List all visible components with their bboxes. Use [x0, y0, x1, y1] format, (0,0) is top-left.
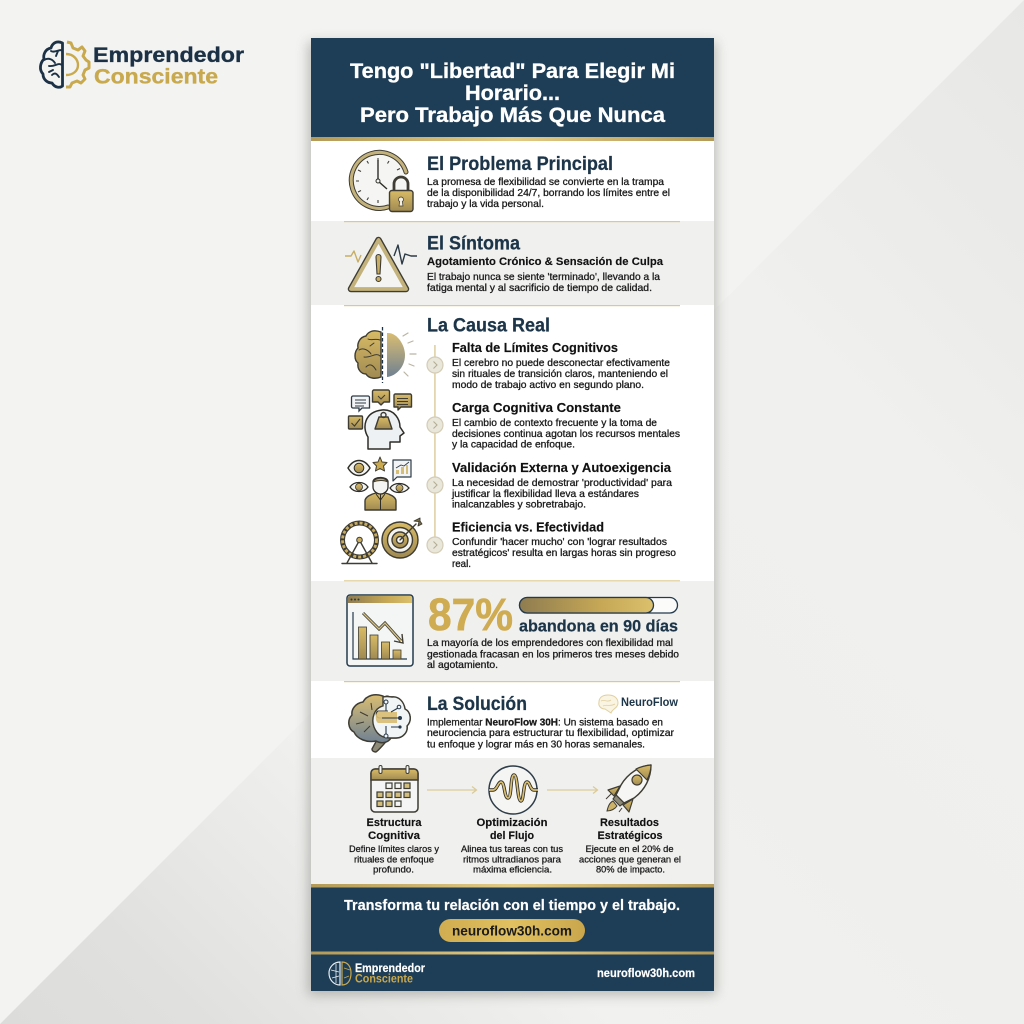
- text block: trabajo y la vida personal.: [427, 199, 544, 210]
- text block: gestionada fracasan en los primeros tres meses debido: [427, 650, 679, 660]
- icon: head with cognitive load: [348, 390, 412, 449]
- text block: de la disponibilidad 24/7, borrando los límites entre el: [427, 188, 670, 199]
- text block: El trabajo nunca se siente 'terminado', llevando a la: [427, 272, 660, 283]
- text block: [427, 718, 675, 750]
- item: carga cognitiva constante: [452, 401, 680, 450]
- step text: máxima eficiencia.: [473, 864, 552, 874]
- step text: 80% de impacto.: [596, 864, 665, 874]
- step title: Cognitiva: [368, 830, 421, 842]
- heading: La Solución: [427, 693, 527, 715]
- icon: brain and gear: [40, 42, 89, 87]
- title: Horario...: [465, 81, 560, 105]
- logo wordmark: [93, 43, 245, 88]
- text block: [427, 177, 670, 210]
- logo wordmark: Consciente: [94, 64, 218, 88]
- header: [311, 38, 714, 141]
- item: falta de límites cognitivos: El cerebro no puede desconectar efectivamente: [452, 358, 670, 369]
- text block: al agotamiento.: [427, 660, 498, 671]
- title: [350, 59, 675, 127]
- panel shadow: [308, 42, 716, 995]
- infographic panel: [311, 38, 714, 991]
- panel: el problema principal: [350, 152, 670, 212]
- item: carga cognitiva constante: y la capacidad de enfoque.: [452, 440, 575, 450]
- step: optimización del flujo: [461, 766, 563, 874]
- item: eficiencia vs efectividad: real.: [452, 559, 471, 570]
- item: validación externa: Validación Externa y Autoexigencia: [452, 461, 672, 475]
- icon: wave in circle: [489, 766, 538, 814]
- item: validación externa: inalcanzables y sobretrabajo.: [452, 500, 586, 510]
- step: resultados estratégicos: [579, 765, 681, 874]
- step text: [579, 844, 681, 874]
- icon: rocket: [606, 765, 651, 812]
- item: validación externa: [451, 461, 672, 510]
- item: carga cognitiva constante: El cambio de contexto frecuente y la toma de: [452, 418, 657, 429]
- item: eficiencia vs efectividad: [452, 520, 676, 570]
- footer logo: [329, 962, 425, 986]
- logo wordmark: Emprendedor: [93, 43, 245, 67]
- icon: clock and padlock: [350, 152, 413, 212]
- step text: rituales de enfoque: [354, 854, 434, 864]
- item: falta de límites cognitivos: Falta de Límites Cognitivos: [452, 341, 618, 355]
- heading: El Problema Principal: [427, 153, 613, 175]
- step title: Optimización: [476, 817, 548, 829]
- step text: Ejecute en el 20% de: [586, 844, 674, 854]
- step title: del Flujo: [490, 830, 534, 842]
- item: carga cognitiva constante: decisiones continua agotan los recursos mentales: [452, 429, 680, 440]
- footer: [329, 962, 695, 986]
- cta heading: Transforma tu relación con el tiempo y el trabajo.: [344, 898, 680, 914]
- title: Pero Trabajo Más Que Nunca: [360, 103, 666, 127]
- arrow: [547, 786, 598, 794]
- subheading: Agotamiento Crónico & Sensación de Culpa: [427, 256, 664, 268]
- timeline: [427, 345, 443, 553]
- text block: [427, 272, 660, 294]
- step title: Estratégicos: [598, 830, 662, 842]
- text block: Implementar NeuroFlow 30H: Un sistema basado en: [427, 718, 663, 728]
- icon: warning triangle: [345, 240, 417, 289]
- panel: estadística: [347, 589, 679, 671]
- step text: ritmos ultradianos para: [463, 854, 562, 864]
- footer url: neuroflow30h.com: [597, 968, 695, 980]
- step title: Estructura: [366, 817, 422, 829]
- text block: [427, 638, 679, 671]
- heading: La Causa Real: [427, 314, 550, 336]
- item: carga cognitiva constante: Carga Cognitiva Constante: [452, 401, 621, 415]
- step text: [349, 844, 439, 874]
- panel: la causa real: [342, 314, 680, 570]
- icon: brain with circuit: [349, 695, 410, 752]
- call to action: [311, 884, 714, 991]
- text block: La promesa de flexibilidad se convierte en la trampa: [427, 177, 664, 188]
- item: falta de límites cognitivos: modo de trabajo activo en segundo plano.: [452, 380, 644, 391]
- footer logo: Consciente: [355, 974, 413, 986]
- step title: [598, 817, 662, 842]
- icon: calendar: [371, 766, 418, 812]
- stat label: abandona en 90 días: [519, 616, 678, 636]
- text block: neurociencia para estructurar tu flexibilidad, optimizar: [427, 728, 675, 739]
- item: eficiencia vs efectividad: Confundir 'hacer mucho' con 'lograr resultados: [452, 537, 667, 548]
- step text: [461, 844, 563, 874]
- step title: [366, 817, 422, 842]
- item: validación externa: La necesidad de demostrar 'productividad' para: [452, 478, 672, 489]
- text block: La mayoría de los emprendedores con flexibilidad mal: [427, 638, 673, 649]
- icon: hamster wheel and target: [342, 518, 422, 564]
- item: eficiencia vs efectividad: estratégicos' resulta en largas horas sin progreso: [452, 548, 676, 559]
- item: validación externa: justificar la flexibilidad lleva a estándares: [451, 489, 639, 500]
- item: falta de límites cognitivos: [452, 341, 670, 391]
- cta button: [439, 919, 585, 942]
- neuroflow logo: NeuroFlow: [621, 697, 678, 709]
- icon: eyes, star and person: [348, 457, 411, 510]
- step: estructura cognitiva: [349, 766, 439, 874]
- cta button: neuroflow30h.com: [452, 922, 572, 938]
- footer logo: Emprendedor: [355, 963, 425, 975]
- panel: la solución: [349, 693, 678, 752]
- icon: declining bar chart window: [347, 595, 413, 666]
- progress bar: [520, 598, 678, 613]
- step title: [476, 817, 548, 842]
- icon: half brain: [355, 327, 416, 383]
- panel: tres pasos: [349, 765, 681, 874]
- step text: Alinea tus tareas con tus: [461, 844, 563, 854]
- step text: profundo.: [373, 864, 414, 874]
- panel: el síntoma: [345, 232, 664, 294]
- step text: acciones que generan el: [579, 854, 681, 864]
- text block: fatiga mental y al sacrificio de tiempo de calidad.: [427, 283, 652, 294]
- neuroflow logo: [599, 695, 678, 713]
- heading: El Síntoma: [427, 232, 520, 254]
- title: Tengo "Libertad" Para Elegir Mi: [350, 59, 675, 83]
- stat: 87%: 87%: [428, 589, 513, 640]
- step text: Define límites claros y: [349, 844, 439, 854]
- item: falta de límites cognitivos: sin rituales de transición claros, manteniendo el: [452, 369, 668, 380]
- logo: Emprendedor Consciente: [40, 42, 245, 88]
- arrow: [427, 786, 476, 794]
- step title: Resultados: [600, 817, 659, 829]
- text block: tu enfoque y lograr más en 30 horas semanales.: [427, 740, 645, 750]
- section backgrounds: [311, 38, 714, 991]
- item: eficiencia vs efectividad: Eficiencia vs. Efectividad: [452, 520, 604, 534]
